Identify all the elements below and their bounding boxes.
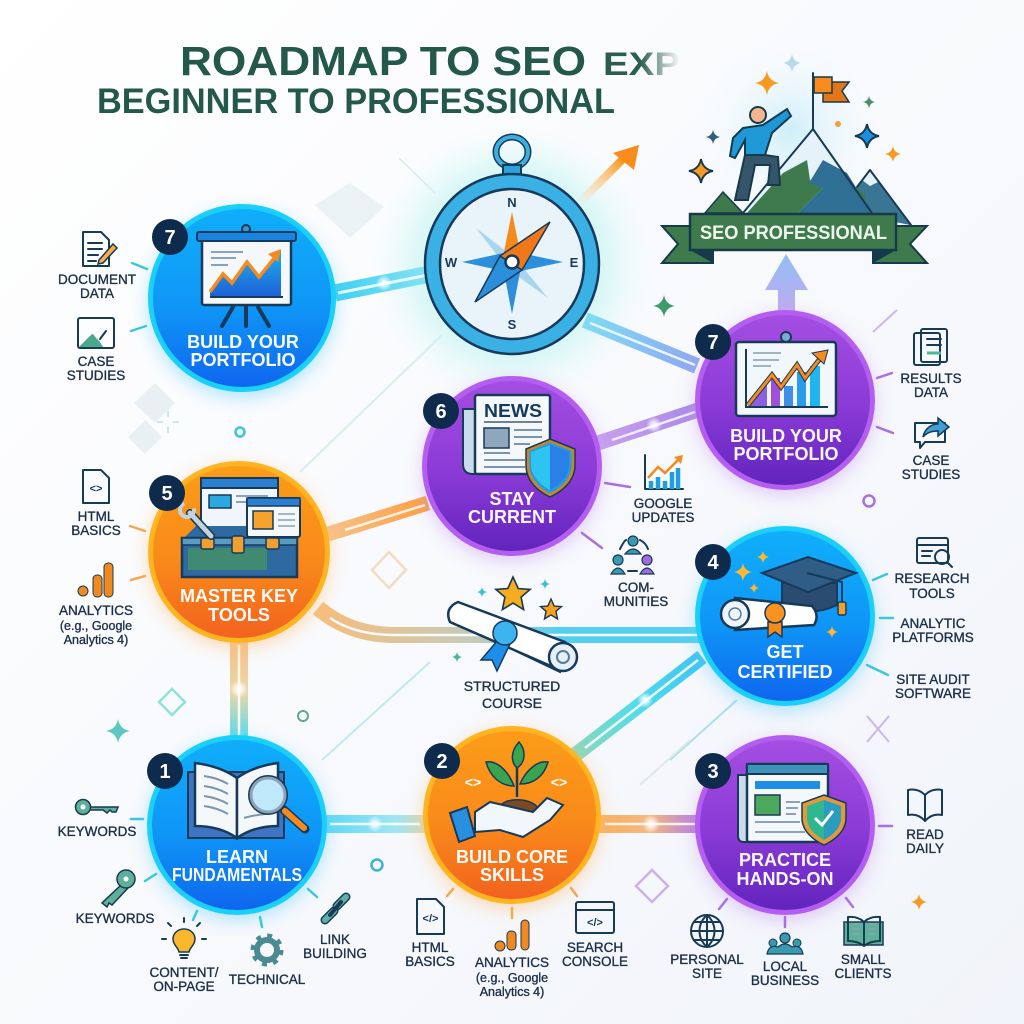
side label: research tools	[894, 538, 970, 601]
compass: N	[507, 195, 517, 210]
label: LEARN	[206, 847, 268, 867]
side label: search console	[562, 902, 628, 969]
number badge	[424, 743, 460, 779]
label: BUILD YOUR	[187, 332, 299, 352]
side label: analytics left: (e.g., Google	[60, 619, 132, 633]
number badge: 1	[159, 761, 171, 783]
label: CURRENT	[468, 507, 556, 527]
label: HANDS-ON	[736, 869, 834, 889]
scroll: structured course	[448, 577, 577, 711]
number badge: 4	[707, 552, 719, 574]
side label: research tools: RESEARCH	[894, 571, 970, 586]
mountain icon: SEO professional	[689, 54, 911, 225]
compass: E	[570, 255, 579, 270]
number badge: 5	[161, 483, 173, 505]
connector flares	[230, 275, 662, 833]
side label: small clients: SMALL	[841, 952, 886, 967]
side label: HTML basics bottom	[405, 899, 455, 969]
compass: S	[508, 317, 517, 332]
side label: analytic platforms: ANALYTIC	[900, 616, 966, 631]
side label: analytics bottom: ANALYTICS	[475, 955, 549, 970]
mountain glow	[685, 25, 895, 235]
side label: research tools: TOOLS	[909, 586, 955, 601]
number badge	[149, 475, 185, 511]
side label: personal site: PERSONAL	[670, 952, 744, 967]
up arrow to banner	[765, 254, 808, 314]
side label: google updates	[632, 455, 694, 525]
label: BUILD CORE	[456, 847, 568, 867]
side label: analytics bottom: (e.g., Google	[476, 971, 548, 985]
icon: open book with magnifier	[188, 763, 305, 838]
icon: hand holding plant: <>	[551, 774, 567, 790]
number badge: 6	[435, 401, 447, 423]
side label: case studies right: CASE	[913, 453, 949, 468]
side label: google updates: GOOGLE	[634, 496, 692, 511]
compass glow	[362, 114, 662, 414]
scroll: structured course: STRUCTURED	[464, 678, 560, 694]
side label: analytics left	[59, 563, 133, 647]
title: EXP	[603, 46, 680, 82]
side label: small clients: CLIENTS	[834, 966, 892, 981]
label: MASTER KEY	[180, 586, 298, 606]
orange arrow from compass	[580, 145, 639, 202]
icon: newspaper and shield	[463, 395, 575, 497]
side label: HTML basics bottom: HTML	[412, 940, 449, 955]
banner: SEO professional	[662, 214, 927, 263]
side label: case studies: CASE	[78, 354, 114, 369]
side label: search console: CONSOLE	[562, 954, 628, 969]
side label: HTML basics	[71, 470, 121, 538]
side label: case studies: STUDIES	[67, 368, 125, 383]
side label: link building: BUILDING	[303, 946, 367, 961]
number badge: 3	[707, 761, 719, 783]
side label: link building	[303, 897, 367, 961]
number badge	[695, 324, 731, 360]
side label: search console: </>	[587, 917, 603, 929]
side label: analytics left: ANALYTICS	[59, 603, 133, 618]
side label: keywords 1: KEYWORDS	[58, 824, 136, 839]
label: STAY	[489, 489, 535, 509]
side label: search console: SEARCH	[567, 940, 623, 955]
side label: google updates: UPDATES	[632, 510, 694, 525]
banner: SEO professional: SEO PROFESSIONAL	[700, 223, 887, 244]
side label: document data: DOCUMENT	[58, 272, 136, 287]
number badge: 7	[164, 227, 176, 249]
connector paths	[239, 274, 737, 824]
label: FUNDAMENTALS	[172, 865, 302, 885]
side label: communities: MUNITIES	[604, 594, 668, 609]
label: TOOLS	[208, 605, 270, 625]
side label: analytics bottom	[475, 920, 549, 999]
title: BEGINNER TO PROFESSIONAL	[97, 82, 615, 121]
icon: hand holding plant	[450, 742, 567, 842]
side label: site audit software: SOFTWARE	[895, 686, 971, 701]
side label: analytics left: Analytics 4)	[64, 633, 128, 647]
side label: content on-page: ON-PAGE	[153, 979, 215, 994]
side label: HTML basics: <>	[90, 483, 102, 495]
side label: technical	[229, 936, 306, 987]
label: CERTIFIED	[737, 662, 833, 682]
side label: local business	[751, 933, 819, 988]
side label: content on-page: CONTENT/	[150, 965, 219, 980]
side label: technical: TECHNICAL	[229, 972, 306, 987]
side label: read daily: DAILY	[906, 841, 944, 856]
title: ROADMAP TO SEO	[180, 38, 586, 84]
side label: communities	[604, 536, 668, 609]
label: GET	[766, 642, 804, 662]
decor squares and sparkles	[106, 158, 927, 910]
icon: graduation cap and diploma	[721, 551, 856, 638]
side label: read daily: READ	[906, 827, 944, 842]
side label: content on-page	[150, 918, 219, 994]
side label: communities: COM-	[618, 580, 654, 595]
number badge: 2	[436, 751, 448, 773]
icon: chart frame	[736, 332, 836, 416]
node 6: stay current	[422, 376, 602, 561]
side label: personal site: SITE	[692, 966, 722, 981]
side label: case studies	[67, 318, 125, 383]
number badge	[695, 753, 731, 789]
side label: results data: DATA	[914, 385, 948, 400]
node 2: build core skills	[423, 726, 601, 909]
side label: local business: LOCAL	[763, 959, 808, 974]
icon: toolbox and windows	[180, 478, 300, 577]
label: PRACTICE	[739, 850, 831, 870]
number badge	[147, 753, 183, 789]
node 4: get certified	[695, 526, 875, 711]
side label: HTML basics: BASICS	[71, 523, 121, 538]
node 1: learn fundamentals	[147, 735, 327, 920]
side label: personal site	[670, 915, 744, 981]
side label: HTML basics: HTML	[78, 509, 115, 524]
label: BUILD YOUR	[730, 426, 842, 446]
side label: case studies right	[902, 418, 960, 482]
node 5: master key tools	[148, 461, 330, 648]
side label: keywords 2: KEYWORDS	[76, 911, 154, 926]
side label: keywords 1	[58, 800, 136, 839]
icon: newspaper and shield: NEWS	[484, 401, 542, 421]
side label: analytics bottom: Analytics 4)	[480, 985, 544, 999]
label: SKILLS	[480, 865, 544, 885]
tick marks	[130, 263, 893, 927]
side label: document data: DATA	[80, 286, 114, 301]
compass: W	[445, 255, 458, 270]
side label: read daily	[906, 790, 944, 856]
side label: keywords 2	[76, 870, 154, 926]
number badge	[152, 219, 188, 255]
number badge	[423, 393, 459, 429]
node 7 purple: build your portfolio	[695, 310, 875, 495]
side label: site audit software: SITE AUDIT	[896, 672, 970, 687]
side label: small clients	[834, 917, 892, 981]
side label: results data	[900, 329, 962, 400]
side label: link building: LINK	[320, 932, 350, 947]
node 7 blue: build your portfolio	[148, 204, 336, 398]
scroll: structured course: COURSE	[482, 695, 542, 711]
side label: results data: RESULTS	[900, 371, 962, 386]
side label: HTML basics bottom: </>	[423, 913, 438, 925]
compass	[425, 137, 599, 354]
side label: local business: BUSINESS	[751, 973, 819, 988]
number badge	[695, 544, 731, 580]
label: PORTFOLIO	[190, 350, 296, 370]
title	[97, 38, 680, 121]
icon: presentation board	[197, 225, 296, 326]
icon: hand holding plant: <>	[465, 774, 481, 790]
side label: case studies right: STUDIES	[902, 467, 960, 482]
node 3: practice hands-on	[695, 735, 875, 920]
label: PORTFOLIO	[734, 444, 838, 464]
icon: web page with shield	[738, 764, 846, 845]
side label: analytic platforms: PLATFORMS	[892, 630, 974, 645]
number badge: 7	[707, 332, 719, 354]
side label: HTML basics bottom: BASICS	[405, 954, 455, 969]
side label: document data	[58, 232, 136, 301]
